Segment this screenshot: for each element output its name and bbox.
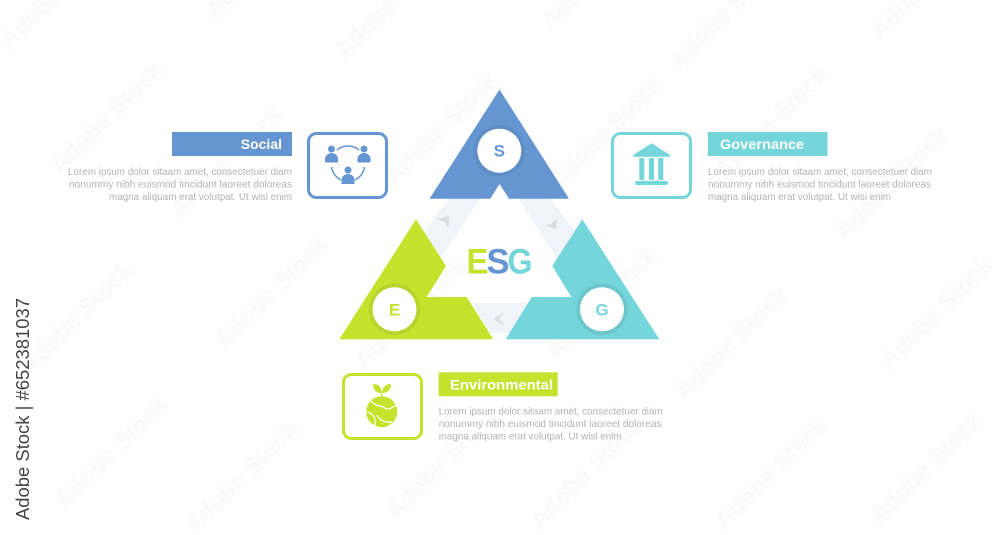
arrows between triangles	[437, 216, 557, 326]
watermark pattern: Adobe Stock	[210, 231, 333, 354]
text block: Social	[68, 166, 292, 203]
text block: Governance: nonummy nibh euismod tincidunt laoreet doloreas	[708, 178, 931, 190]
triangle: Social	[430, 90, 569, 199]
heading: Environmental	[439, 372, 558, 396]
watermark pattern: Adobe Stock	[865, 406, 988, 529]
watermark pattern: Adobe Stock	[15, 256, 138, 379]
heading: Governance	[708, 132, 828, 156]
triangle: Governance	[506, 219, 659, 339]
stock id label: Adobe Stock | #652381037	[12, 298, 33, 520]
icon: globe with sprout	[344, 374, 422, 438]
badge S	[474, 125, 525, 176]
badge E: E	[389, 300, 400, 319]
heading: Social: Social	[241, 136, 282, 152]
watermark pattern: Adobe Stock	[350, 251, 473, 374]
badge G: G	[595, 300, 609, 319]
text block: Social: magna aliquam erat volutpat. Ut wisi enim	[109, 191, 292, 203]
text block: Environmental: Lorem ipsum dolor sitaam amet, consectetuer diam	[439, 406, 663, 418]
text block: Environmental	[439, 406, 663, 442]
watermark pattern: Adobe Stock	[50, 391, 173, 514]
watermark pattern: Adobe Stock	[830, 121, 953, 244]
watermark pattern: Adobe Stock	[380, 66, 503, 189]
watermark pattern: Adobe Stock	[380, 401, 503, 524]
watermark pattern: Adobe Stock	[540, 241, 663, 364]
watermark pattern: Adobe Stock	[710, 411, 833, 534]
watermark pattern: Adobe Stock	[545, 71, 668, 194]
watermark pattern: Adobe Stock	[165, 101, 288, 224]
heading: Governance: Governance	[720, 136, 804, 152]
center ESG title	[466, 242, 532, 282]
text block: Governance: magna aliquam erat volutpat. Ut wisi enim	[708, 191, 891, 203]
watermark pattern: Adobe Stock	[670, 281, 793, 404]
text block: Governance	[708, 166, 932, 203]
badge E	[369, 284, 420, 335]
text block: Social: nonummy nibh euismod tincidunt laoreet doloreas	[69, 178, 292, 190]
icon: people network	[308, 134, 386, 198]
watermark pattern: Adobe Stock	[875, 251, 998, 374]
center ESG title: E	[466, 242, 488, 282]
center ESG title: S	[486, 242, 510, 282]
icon: institution building	[612, 134, 690, 198]
heading: Environmental: Environmental	[450, 376, 553, 392]
badge S: S	[494, 142, 505, 161]
text block: Governance: Lorem ipsum dolor sitaam amet, consectetuer diam	[708, 166, 932, 178]
text block: Environmental: magna aliquam erat volutpat. Ut wisi enim	[439, 430, 622, 442]
text block: Environmental: nonummy nibh euismod tincidunt laoreet doloreas	[439, 418, 662, 430]
watermark pattern: Adobe Stock	[710, 61, 833, 184]
center ESG title: G	[508, 242, 532, 282]
badge G	[576, 284, 628, 335]
heading: Social	[172, 132, 292, 156]
text block: Social: Lorem ipsum dolor sitaam amet, consectetuer diam	[68, 166, 292, 178]
watermark pattern: Adobe Stock	[525, 411, 648, 534]
connector bands	[424, 198, 576, 333]
watermark pattern: Adobe Stock	[45, 56, 168, 179]
triangle: Environmental	[339, 219, 493, 339]
